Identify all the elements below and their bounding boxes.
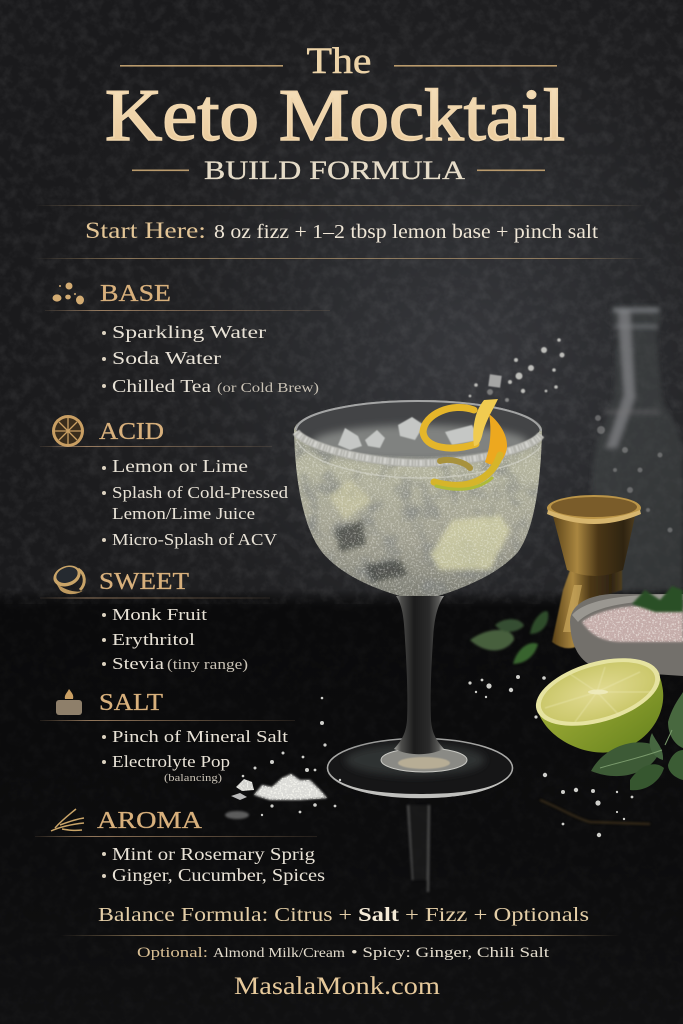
panel: base <box>45 281 330 396</box>
list: base: Sparkling Water <box>112 322 266 342</box>
upper empty glass and ice <box>296 400 540 456</box>
list: aroma <box>102 844 325 885</box>
scattered salt, right side <box>468 675 633 837</box>
jigger <box>547 495 641 648</box>
heading: aroma: AROMA <box>97 808 203 834</box>
salted rim <box>296 401 541 431</box>
list: acid: Splash of Cold-Pressed <box>112 483 289 502</box>
list: sweet <box>102 605 248 673</box>
start here banner: 8 oz fizz + 1–2 tbsp lemon base + pinch salt <box>214 222 599 243</box>
list: sweet: Erythritol <box>112 630 195 649</box>
list: base: Soda Water <box>112 348 221 368</box>
icon: salt block <box>56 689 82 715</box>
optional line: Almond Milk/Cream <box>213 945 346 960</box>
panel: aroma <box>35 808 325 885</box>
list: base <box>102 322 319 396</box>
cocktail glass <box>290 395 550 892</box>
optional line: • Spicy: Ginger, Chili Salt <box>351 945 550 961</box>
balance formula: + Fizz + Optionals <box>405 904 589 926</box>
heading: base: BASE <box>100 281 171 307</box>
heading: sweet: SWEET <box>99 569 189 595</box>
start here banner <box>35 205 645 259</box>
list: acid <box>102 456 289 549</box>
optional line: Optional: <box>137 945 208 961</box>
balance formula: Salt <box>358 904 399 926</box>
start here banner: Start Here: <box>85 218 206 243</box>
lime half <box>528 646 668 753</box>
list: sweet: Stevia <box>112 654 165 673</box>
heading: acid: ACID <box>99 419 164 445</box>
panel: acid <box>40 415 289 549</box>
panel: sweet <box>40 562 270 673</box>
list: acid: Micro-Splash of ACV <box>112 530 277 549</box>
icon: citrus slice <box>52 415 84 447</box>
list: salt: (balancing) <box>164 773 222 784</box>
list: sweet: Monk Fruit <box>112 605 207 624</box>
heading: salt: SALT <box>99 690 163 716</box>
icon: monk fruit <box>50 562 84 594</box>
list: salt: Electrolyte Pop <box>112 752 230 771</box>
glass base <box>328 738 512 798</box>
title: Keto Mocktail: Keto Mocktail <box>105 75 565 157</box>
bottle in background <box>592 306 683 590</box>
salt sparkles in the air <box>469 338 564 402</box>
list: aroma: Mint or Rosemary Sprig <box>112 844 315 864</box>
icon: herb sprig <box>51 809 84 831</box>
list: salt: Pinch of Mineral Salt <box>112 727 288 746</box>
lemon twist garnish <box>423 399 507 489</box>
website: MasalaMonk.com <box>234 973 441 1000</box>
title: The: The <box>306 41 372 82</box>
salt pile on table <box>225 675 650 837</box>
salt bowl <box>570 586 683 676</box>
list: aroma: Ginger, Cucumber, Spices <box>112 865 325 885</box>
panel: salt <box>40 689 295 784</box>
mint behind the glass <box>470 611 548 664</box>
glass bowl with liquid <box>290 395 550 605</box>
balance formula: Balance Formula: Citrus + <box>98 904 352 926</box>
title <box>105 41 565 185</box>
reflection of stem on table <box>408 805 429 892</box>
optional line <box>137 945 550 961</box>
glass stem <box>394 596 444 754</box>
list: sweet: (tiny range) <box>167 657 248 673</box>
list: acid: Lemon/Lime Juice <box>112 504 255 523</box>
list: base: (or Cold Brew) <box>217 381 319 396</box>
list: salt <box>102 727 288 784</box>
mint sprig <box>591 692 683 790</box>
icon: bubbles <box>52 282 84 304</box>
subtitle: BUILD FORMULA <box>204 156 465 185</box>
list: base: Chilled Tea <box>112 376 211 396</box>
list: acid: Lemon or Lime <box>112 456 248 476</box>
balance formula <box>60 904 620 936</box>
